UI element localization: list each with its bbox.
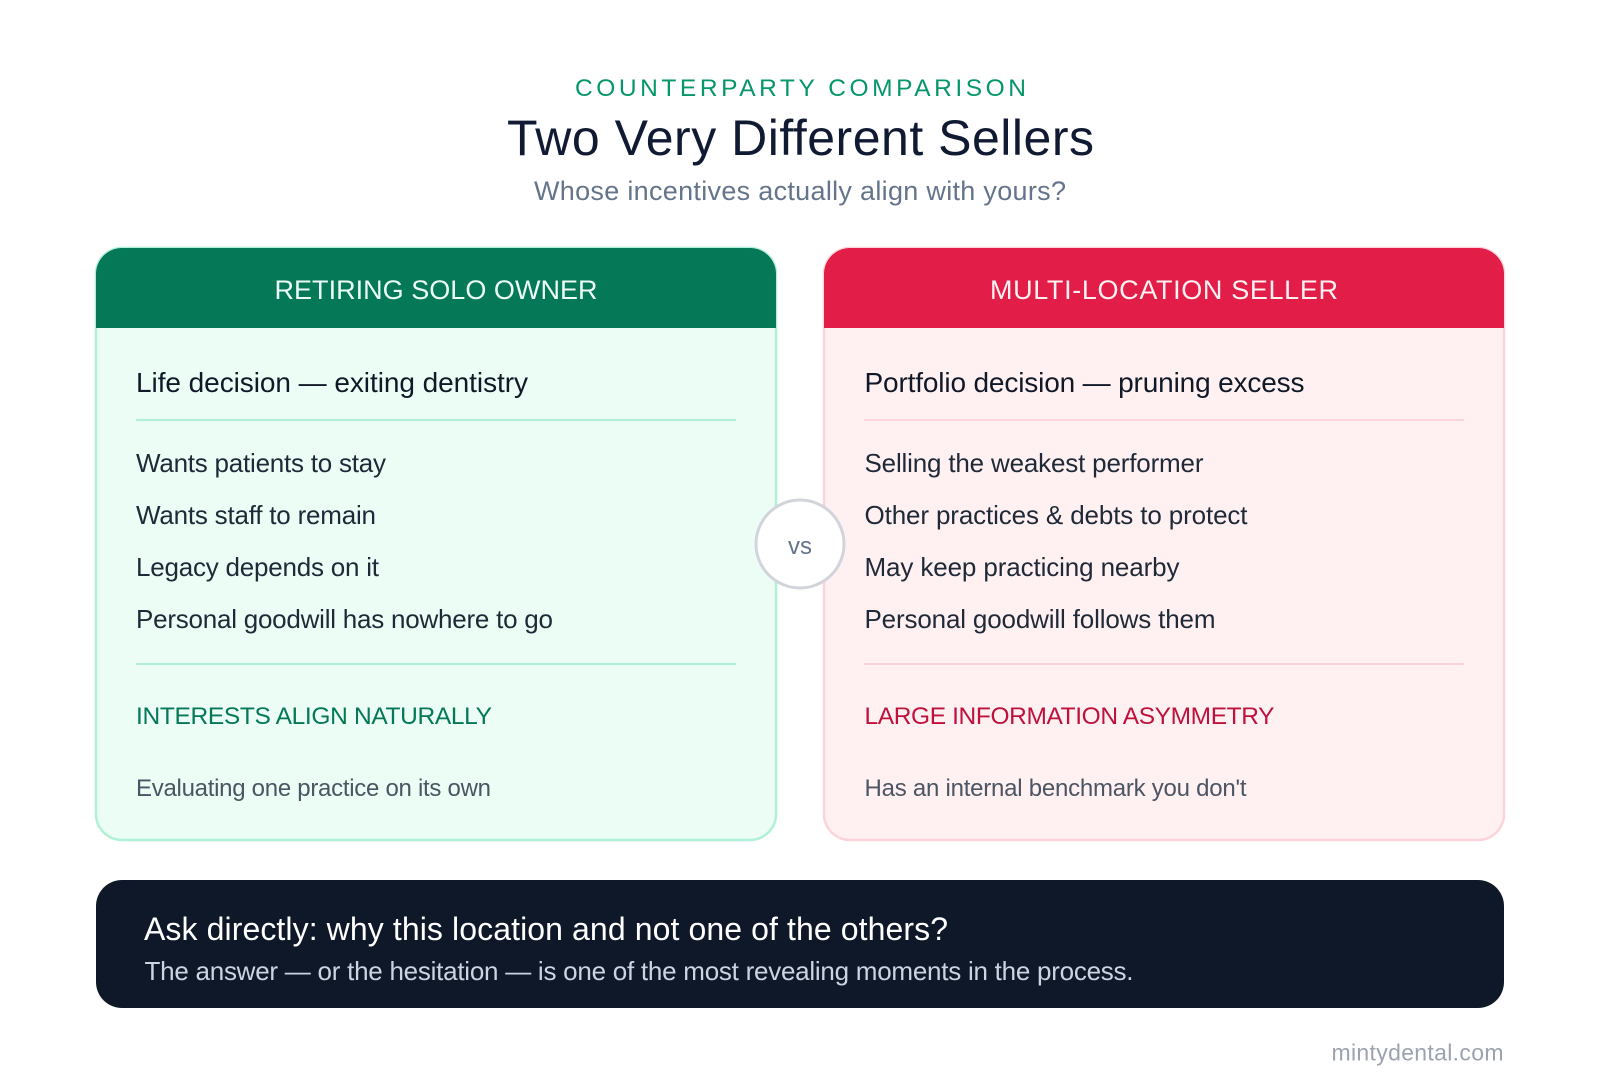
verdict: LARGE INFORMATION ASYMMETRY: [864, 703, 1274, 730]
note: Evaluating one practice on its own: [136, 775, 491, 802]
panel header bar: [824, 248, 1504, 328]
eyebrow: COUNTERPARTY COMPARISON: [575, 75, 1026, 102]
panel heading: RETIRING SOLO OWNER: [274, 275, 598, 305]
verdict: INTERESTS ALIGN NATURALLY: [136, 703, 492, 730]
callout explanation: The answer — or the hesitation — is one of the most revealing moments in the process.: [144, 956, 1134, 986]
panel heading: MULTI-LOCATION SELLER: [990, 275, 1338, 305]
footer brand: mintydental.com: [1332, 1040, 1504, 1066]
callout: ask directly: [96, 880, 1504, 1008]
callout question: Ask directly: why this location and not one of the others?: [144, 911, 948, 947]
list of motivations: Personal goodwill has nowhere to go: [136, 604, 553, 634]
list of motivations: Wants patients to stay: [136, 448, 386, 478]
list of motivations: Other practices & debts to protect: [864, 500, 1248, 530]
list of motivations: Selling the weakest performer: [864, 448, 1204, 478]
list of motivations: [136, 448, 553, 634]
lead statement: Portfolio decision — pruning excess: [864, 367, 1304, 398]
panel: multi-location seller: [824, 248, 1504, 840]
header block: [507, 75, 1094, 206]
list of motivations: Personal goodwill follows them: [864, 604, 1216, 634]
list of motivations: Wants staff to remain: [136, 500, 376, 530]
panel background: [824, 248, 1504, 840]
list of motivations: [864, 448, 1248, 634]
panel header bar: [96, 248, 776, 328]
title: Two Very Different Sellers: [507, 110, 1094, 166]
lead statement: Life decision — exiting dentistry: [136, 367, 528, 398]
list of motivations: May keep practicing nearby: [864, 552, 1180, 582]
vs badge: [756, 500, 844, 588]
panel background: [96, 248, 776, 840]
vs badge: vs: [788, 533, 812, 560]
list of motivations: Legacy depends on it: [136, 552, 380, 582]
panel: retiring solo owner: [96, 248, 776, 840]
note: Has an internal benchmark you don't: [864, 775, 1247, 802]
subtitle: Whose incentives actually align with yours?: [534, 176, 1066, 206]
